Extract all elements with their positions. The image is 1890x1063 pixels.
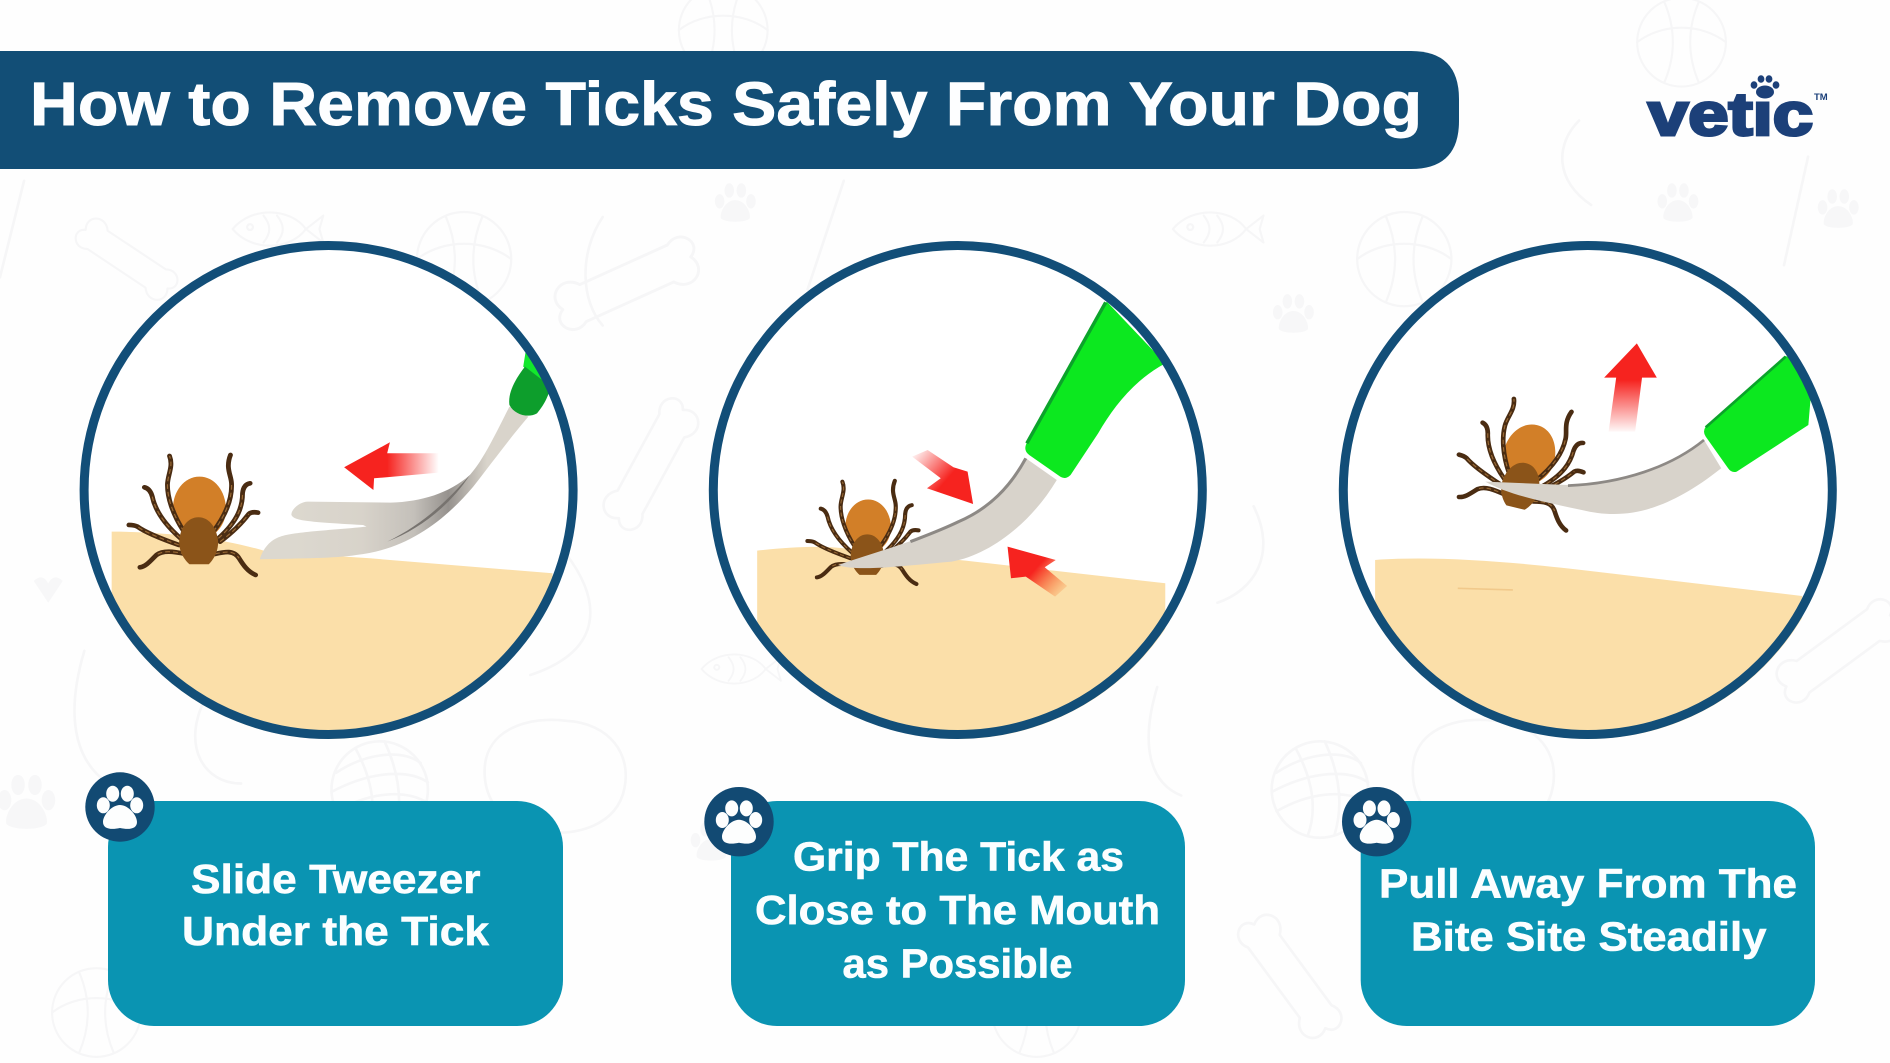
step 1 text: Slide Tweezer [191, 856, 481, 902]
icon: paw badge 3 [1342, 787, 1411, 856]
icon: paw badge 2 [704, 787, 774, 856]
panel: step 3 illustration [1343, 245, 1833, 750]
card: step 3 [1342, 787, 1815, 1026]
step 1 text [182, 856, 489, 954]
step 3 text: Pull Away From The [1379, 860, 1797, 906]
step 2 text [755, 834, 1160, 986]
arrow: red lower [1008, 547, 1067, 597]
step 3 text [1379, 860, 1797, 960]
tweezers [260, 352, 556, 559]
step 2 text: Grip The Tick as [793, 834, 1124, 880]
skin [1375, 558, 1802, 750]
panel: step 1 illustration [84, 245, 574, 750]
icon: paw badge 1 [85, 772, 155, 842]
trademark: TM [1814, 92, 1828, 103]
title banner [0, 51, 1459, 169]
tick [807, 481, 919, 584]
card: step 1 [85, 772, 563, 1026]
tick [129, 455, 258, 575]
skin [757, 547, 1165, 750]
tick [1456, 396, 1586, 533]
tweezers [1485, 356, 1811, 514]
arrow: red left [344, 442, 439, 490]
step 1 text: Under the Tick [182, 908, 489, 954]
tweezers [838, 302, 1165, 568]
step 2 text: Close to The Mouth [755, 887, 1160, 933]
arrow: red up [1604, 343, 1657, 432]
icon: logo paw [1751, 75, 1779, 98]
step 2 text: as Possible [842, 940, 1072, 986]
title text: How to Remove Ticks Safely From Your Dog [30, 70, 1422, 139]
panel: step 2 illustration [713, 245, 1203, 750]
arrow: red upper [912, 450, 973, 504]
card: step 2 [704, 787, 1185, 1026]
logo: vetic: vetic [1648, 81, 1813, 148]
step 3 text: Bite Site Steadily [1411, 914, 1767, 960]
skin [112, 532, 552, 750]
